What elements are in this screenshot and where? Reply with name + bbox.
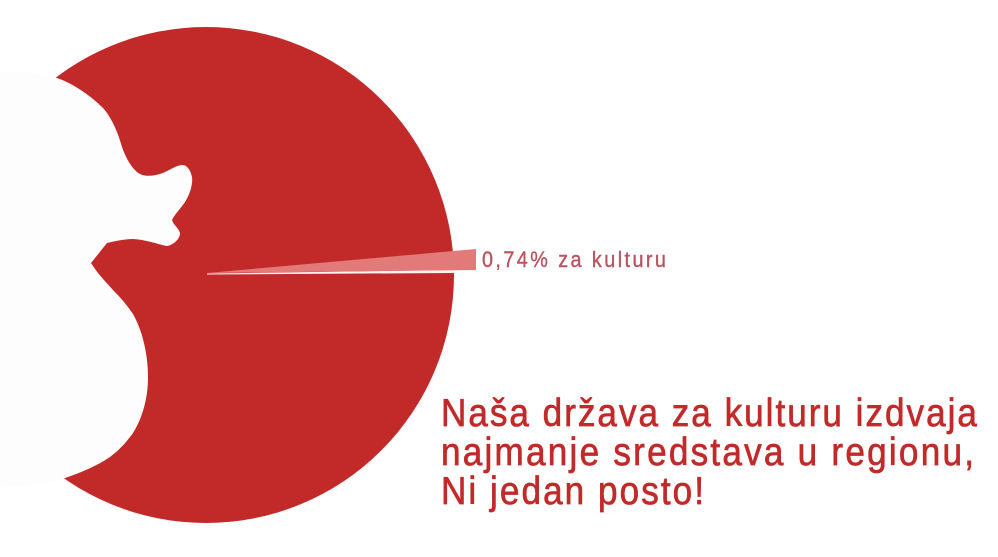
silhouette: head profile cut-out [0,71,192,487]
heading line 1: Naša država za kulturu izdvaja [441,390,977,434]
heading line 2: najmanje sredstava u regionu, [441,429,974,473]
pie chart: red circle [0,27,454,523]
pie wedge: 0.74% slice [207,249,476,273]
label: 0,74% za kulturu: 0,74% za kulturu [482,248,666,272]
heading text block [441,390,977,512]
heading line 3: Ni jedan posto! [441,468,704,512]
white gap under wedge [207,270,454,274]
